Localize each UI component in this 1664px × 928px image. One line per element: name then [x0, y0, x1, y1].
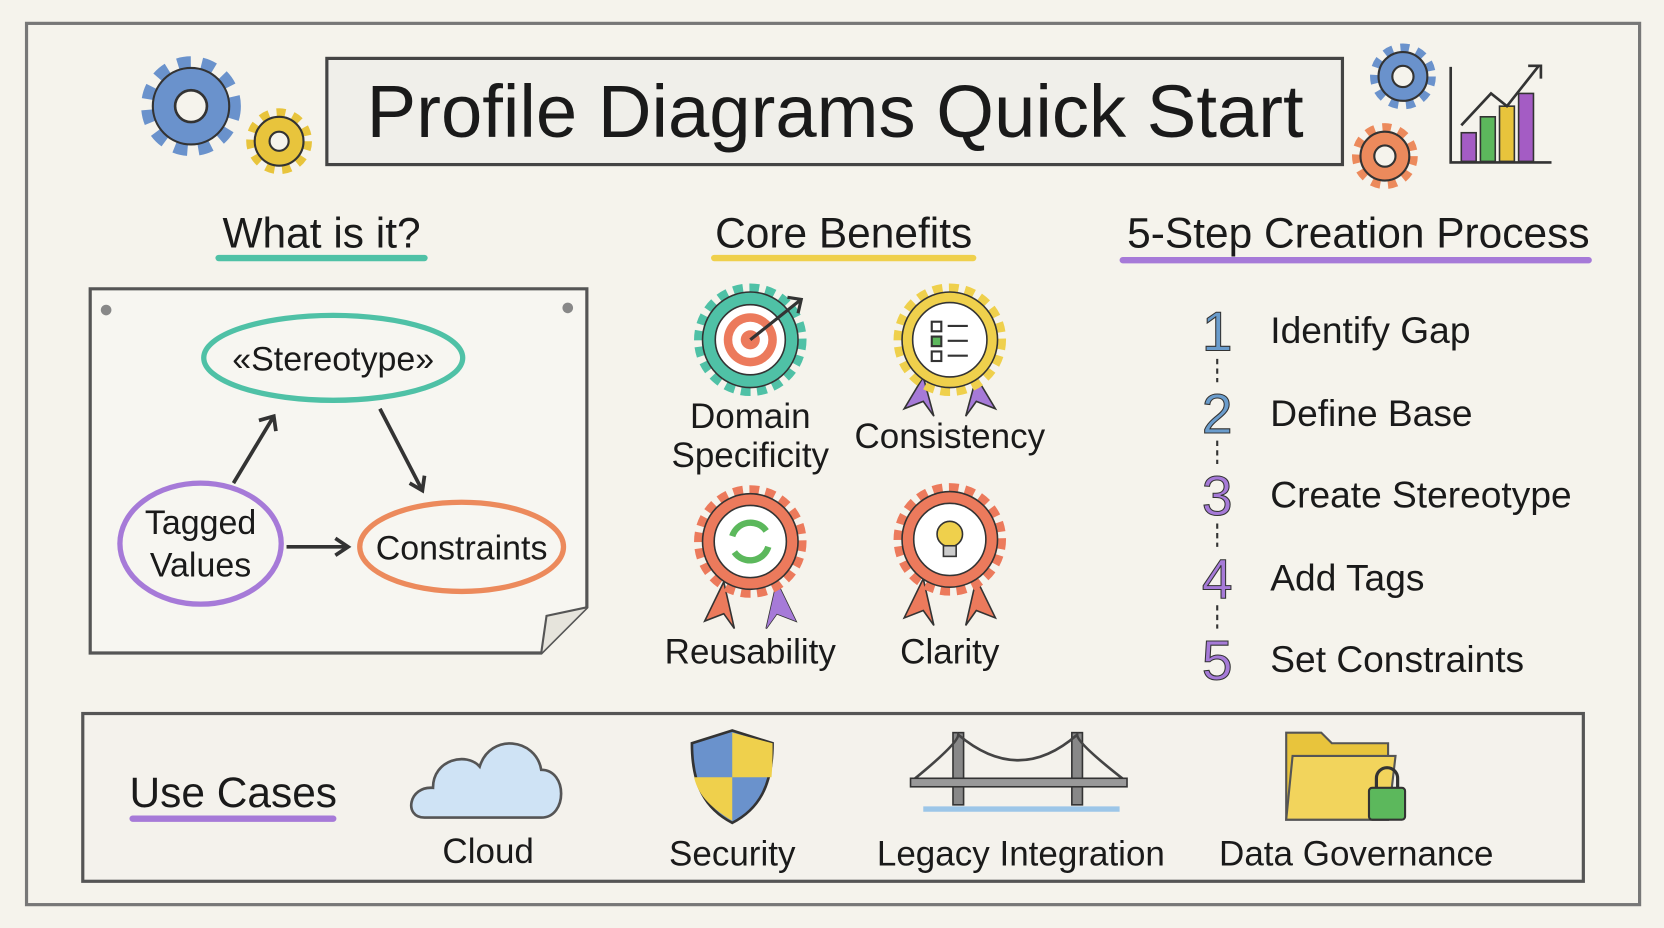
badge: domain specificity: Domain [690, 397, 811, 436]
badge: reusability [665, 491, 836, 672]
icon: cloud [411, 743, 561, 871]
icon: left gears [149, 64, 307, 169]
steps list: 4 [1202, 548, 1233, 610]
steps list: Create Stereotype [1270, 474, 1572, 516]
stereotype ellipse [204, 315, 463, 400]
badge: clarity: Clarity [900, 633, 1000, 672]
heading: 5-Step Creation Process: 5-Step Creation Process [1127, 209, 1590, 256]
tagged values ellipse: Tagged [145, 504, 256, 542]
badge: domain specificity [671, 289, 830, 475]
icon: cloud: Cloud [442, 832, 534, 871]
icon: folder with lock [1219, 733, 1493, 873]
icon: shield: Security [669, 834, 796, 873]
steps list [1202, 300, 1572, 692]
icon: right gears and chart [1357, 49, 1552, 184]
badge: domain specificity: Specificity [671, 436, 830, 475]
steps list: Add Tags [1270, 556, 1424, 598]
heading: What is it?: What is it? [222, 209, 421, 256]
steps list: 5 [1202, 630, 1233, 692]
tagged values ellipse: Values [150, 547, 251, 585]
steps list: 1 [1202, 300, 1233, 362]
badge: consistency [854, 289, 1046, 456]
constraints ellipse: Constraints [376, 530, 547, 568]
badge: consistency: Consistency [854, 417, 1046, 456]
steps list: Define Base [1270, 392, 1473, 434]
icon: shield [669, 731, 796, 873]
steps list: 3 [1202, 465, 1233, 527]
title: Profile Diagrams Quick Start [367, 70, 1304, 153]
badge: reusability: Reusability [665, 633, 836, 672]
steps list: Identify Gap [1270, 309, 1471, 351]
steps list: 2 [1202, 383, 1233, 445]
panel: what is it note [90, 289, 587, 653]
icon: folder with lock: Data Governance [1219, 834, 1493, 873]
constraints ellipse [360, 502, 564, 591]
stereotype ellipse: «Stereotype» [232, 341, 434, 379]
steps list: Set Constraints [1270, 638, 1524, 680]
arrows [233, 409, 424, 555]
icon: bridge [877, 733, 1165, 873]
heading: Use Cases: Use Cases [129, 769, 337, 816]
badge: clarity [899, 488, 1001, 672]
heading: Core Benefits: Core Benefits [715, 209, 972, 256]
icon: bridge: Legacy Integration [877, 834, 1165, 873]
tagged values ellipse [120, 483, 281, 604]
panel: use cases [83, 714, 1583, 881]
